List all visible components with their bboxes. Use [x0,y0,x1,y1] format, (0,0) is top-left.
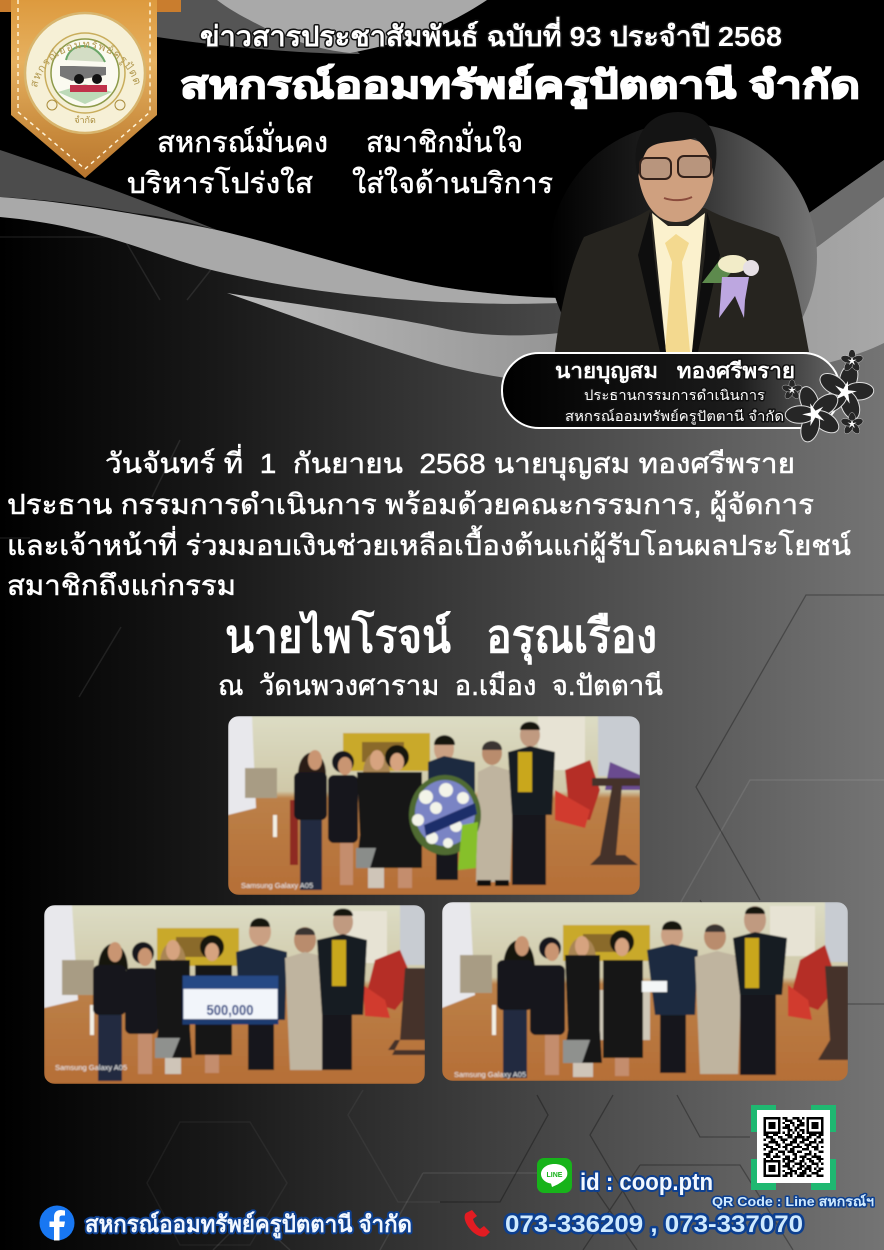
swoosh: right dark band [690,160,884,298]
slogan: ใส่ใจด้านบริการ [352,166,553,200]
icon: LINE: LINE [547,1172,563,1179]
shirt [652,213,705,352]
portrait: chairman [555,112,809,352]
photo: wreath presentation: Samsung Galaxy A05 [241,881,313,890]
people [294,722,555,890]
QR code [751,1105,836,1190]
QR modules [764,1117,824,1177]
slogan [127,122,553,200]
ribbon bar [0,0,181,12]
photo: cheque handover: Samsung Galaxy A05 [454,1070,526,1079]
name plate [502,353,840,428]
swoosh: left light strip [0,197,560,304]
glasses [640,156,711,179]
photo: cheque handover [442,902,848,1081]
body paragraph [7,444,851,601]
wreath [409,775,481,855]
lapels [638,212,720,352]
seal [24,12,146,134]
ribbon badge with seal [0,0,181,178]
body paragraph: และเจ้าหน้าที่ ร่วมมอบเงินช่วยเหลือเบื้องต้นแก่ผู้รับโอนผลประโยชน์ [7,525,851,563]
phone numbers: 073-336209 , 073-337070 [505,1211,803,1238]
slogan: สมาชิกมั่นใจ [366,122,523,159]
photo: wreath presentation [228,716,640,895]
deceased member name: นายไพโรจน์ อรุณเรือง [225,609,657,665]
QR caption: QR Code : Line สหกรณ์ฯ [712,1194,874,1209]
QR green corners [751,1105,836,1190]
name: นายบุญสม ทองศรีพราย [555,359,795,385]
board [183,976,278,1024]
icon: phone [465,1210,490,1237]
ribbon banner [11,0,157,178]
portrait circle [549,123,817,391]
body paragraph: สมาชิกถึงแก่กรรม [7,570,236,601]
flowers [776,350,881,451]
hair [636,112,716,178]
swoosh: left dark band [0,150,217,230]
organization title: สหกรณ์ออมทรัพย์ครูปัตตานี จำกัด [180,64,860,109]
body paragraph: ประธาน กรรมการดำเนินการ พร้อมด้วยคณะกรรมการ, ผู้จัดการ [7,489,814,522]
tie [665,234,690,352]
photo: 500,000 baht cheque board [44,905,425,1084]
swoosh: top black field [0,0,884,298]
organization: สหกรณ์ออมทรัพย์ครูปัตตานี จำกัด [565,408,784,425]
header text [180,16,860,109]
facebook page name: สหกรณ์ออมทรัพย์ครูปัตตานี จำกัด [85,1211,412,1239]
slogan: สหกรณ์มั่นคง [157,122,328,159]
suit [555,208,809,352]
face [638,138,714,222]
corsage [702,255,759,318]
newsletter issue line: ข่าวสารประชาสัมพันธ์ ฉบับที่ 93 ประจำปี 2568 [200,16,782,52]
position: ประธานกรรมการดำเนินการ [584,387,765,403]
stitching [18,0,150,169]
swoosh: lower light wedge [227,197,884,387]
seal: จำกัด [74,115,96,125]
icon: facebook [40,1206,74,1240]
location: ณ วัดนพวงศาราม อ.เมือง จ.ปัตตานี [218,670,663,701]
photo: 500,000 baht cheque board: 500,000 [206,1002,254,1019]
photo: 500,000 baht cheque board: Samsung Galaxy A05 [55,1063,127,1072]
slogan: บริหารโปร่งใส [127,166,313,200]
icon: LINE [537,1158,572,1193]
LINE id: id : coop.ptn [580,1169,713,1196]
swoosh: top gray shapes [157,0,487,54]
body paragraph: วันจันทร์ ที่ 1 กันยายน 2568 นายบุญสม ทองศรีพราย [105,444,795,481]
